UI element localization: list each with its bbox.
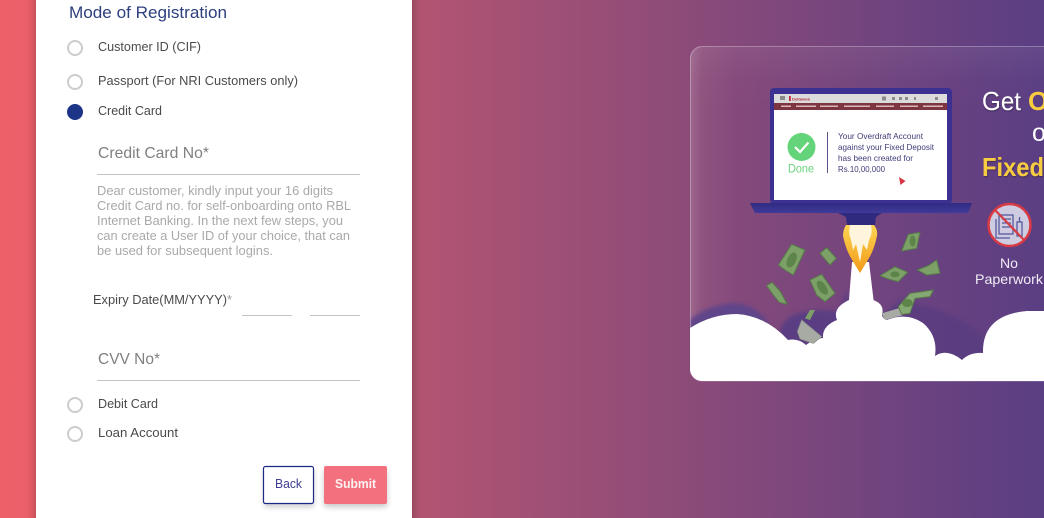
radio: Loan Account	[68, 425, 178, 441]
helper text: Credit Card no. for self-onboarding onto RBL	[97, 198, 351, 213]
note 8 grey	[882, 308, 903, 320]
heading: Mode of Registration: Mode of Registration	[69, 3, 227, 22]
note 1	[778, 244, 805, 275]
note 8	[898, 290, 933, 314]
banner heading: Get: Get	[982, 86, 1022, 116]
rocket nozzle	[838, 213, 882, 225]
radio: Credit Card selected: Credit Card	[98, 103, 162, 118]
field: Expiry Date: Expiry Date(MM/YYYY)*	[93, 292, 232, 307]
done check: Done	[788, 162, 814, 176]
label: No Paperwork: Paperwork	[975, 271, 1044, 287]
money notes	[767, 232, 940, 343]
radio: Customer ID (CIF): Customer ID (CIF)	[98, 39, 201, 54]
label: No Paperwork	[975, 255, 1044, 287]
button: Submit: Submit	[335, 476, 377, 491]
laptop screen	[774, 94, 947, 200]
icon: no paperwork	[988, 204, 1030, 246]
divider	[827, 132, 828, 173]
radio: Credit Card selected	[67, 103, 162, 120]
field: CVV No: CVV No*	[98, 351, 160, 368]
helper text: be used for subsequent logins.	[97, 243, 273, 258]
laptop base	[750, 203, 972, 213]
confirmation message	[838, 131, 935, 174]
confirmation message: Rs.10,00,000	[838, 164, 885, 174]
app logo	[789, 96, 791, 101]
note 3	[810, 274, 835, 302]
helper text: can create a User ID of your choice, that can	[97, 228, 350, 243]
helper text	[97, 183, 351, 258]
app red nav	[774, 103, 947, 110]
helper text: Dear customer, kindly input your 16 digits	[97, 183, 333, 198]
laptop lid	[770, 88, 952, 204]
note 5	[902, 232, 920, 251]
cursor	[899, 177, 906, 185]
panel: promo banner	[690, 46, 1044, 381]
radio: Loan Account: Loan Account	[98, 425, 178, 440]
radio: Passport: Passport (For NRI Customers only)	[98, 73, 298, 88]
confirmation message: against your Fixed Deposit	[838, 142, 935, 152]
clouds	[690, 300, 1044, 381]
rocket exhaust trail	[849, 262, 874, 300]
app toolbar icons	[780, 96, 938, 100]
helper text: Internet Banking. In the next few steps, you	[97, 213, 343, 228]
note 4	[767, 282, 787, 304]
rocket flame	[843, 225, 877, 273]
note 2	[820, 248, 836, 265]
panel: registration form	[34, 0, 414, 518]
confirmation message: has been created for	[838, 153, 913, 163]
laptop	[750, 88, 972, 225]
button: Submit	[324, 466, 387, 507]
app top bar	[774, 94, 947, 103]
radio: Debit Card	[68, 396, 158, 412]
confirmation message: Your Overdraft Account	[838, 131, 924, 141]
laptop: Deltaweb	[792, 96, 811, 102]
radio: Debit Card: Debit Card	[98, 396, 158, 411]
button: Back	[264, 466, 314, 507]
dark cloud shadows	[690, 294, 984, 360]
note 6	[917, 260, 940, 275]
note 7	[880, 267, 908, 282]
banner frame	[690, 46, 1044, 381]
button: Back: Back	[275, 476, 302, 491]
note 9 grey	[797, 310, 822, 343]
field: Credit Card No: Credit Card No*	[98, 145, 209, 162]
done check	[788, 133, 816, 176]
label: No Paperwork: No	[1000, 255, 1018, 271]
